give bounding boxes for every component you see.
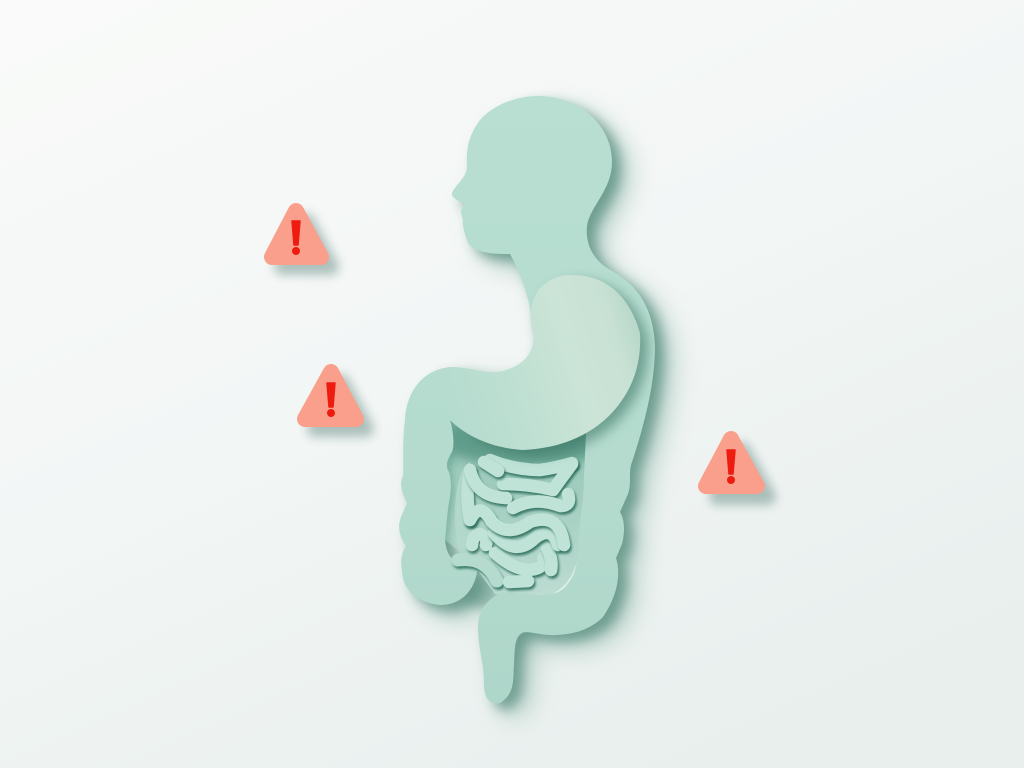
stomach xyxy=(450,275,648,456)
shadow pocket between ileum and rectum xyxy=(464,576,500,608)
body, colon and rectum silhouette xyxy=(399,96,655,703)
inner cavity behind the intestines xyxy=(445,420,586,595)
body silhouette shadow xyxy=(408,103,673,717)
small intestine coils xyxy=(468,460,572,582)
illustration: digestive system with warning signs xyxy=(0,0,782,730)
warning triangle right xyxy=(706,439,768,497)
warning triangle middle left xyxy=(305,372,366,429)
cavity shading under stomach xyxy=(445,421,586,595)
terminal ileum joining the colon xyxy=(458,559,497,581)
warning triangle top left xyxy=(272,211,331,267)
